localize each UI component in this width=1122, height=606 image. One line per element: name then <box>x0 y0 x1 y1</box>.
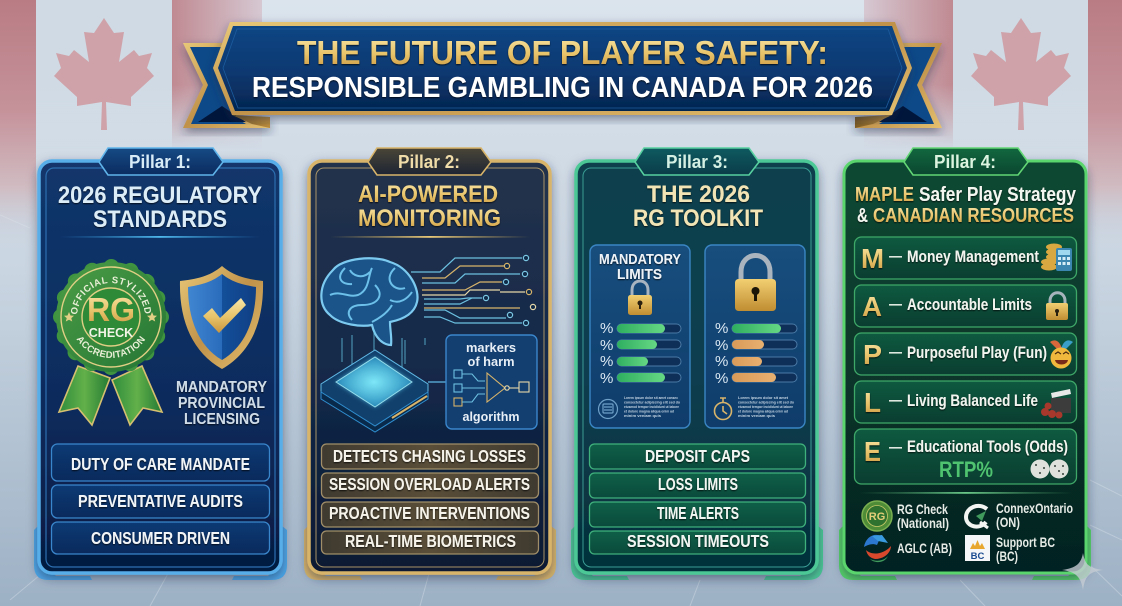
row: E educational tools <box>854 429 1076 484</box>
tab: pillar 1: Pillar 1: <box>129 152 191 172</box>
fine print left: et dolore magna aliqua enim ad <box>624 410 674 414</box>
resources: ConnexOntario <box>966 500 1073 530</box>
heading: the 2026 RG toolkit: RG TOOLKIT <box>633 205 763 232</box>
banner title line 1: THE FUTURE OF PLAYER SAFETY: <box>297 34 828 71</box>
tab: pillar 2 <box>368 148 491 175</box>
panel: pillar 2 AI monitoring <box>304 148 556 580</box>
icon: RG check badge: RG <box>87 291 135 328</box>
heading: 2026 regulatory standards: 2026 REGULATORY <box>58 182 262 209</box>
card: mandatory limits: MANDATORY <box>599 251 681 268</box>
icon: clapperboard and fruit <box>1041 389 1071 418</box>
banner plate <box>213 22 912 115</box>
panel: pillar 3 RG toolkit <box>571 148 823 580</box>
icon: stopwatch <box>714 398 732 420</box>
list: pillar 1 items: DUTY OF CARE MANDATE <box>71 454 250 474</box>
row: L living balanced life <box>854 381 1076 423</box>
list: pillar 3 items: SESSION TIMEOUTS <box>627 531 769 551</box>
row: E educational tools: RTP% <box>939 457 993 482</box>
list: pillar 2 items: SESSION OVERLOAD ALERTS <box>329 474 530 494</box>
list: pillar 3 items <box>590 444 806 554</box>
icon: jester emoji <box>1050 340 1073 368</box>
resources: RG check: RG <box>869 511 885 523</box>
tab: pillar 4 <box>904 148 1028 175</box>
icon: large padlock <box>735 256 776 311</box>
tab: pillar 4: Pillar 4: <box>934 152 996 172</box>
fine print right: et dolore magna aliqua enim ad <box>738 410 788 414</box>
row: P purposeful play <box>854 333 1076 375</box>
bars: right limits: % <box>715 337 728 354</box>
icon: RG check badge: OFFICIAL STYLIZED <box>71 276 151 314</box>
heading: AI-powered monitoring <box>358 181 501 232</box>
icon: RG check badge: CHECK <box>89 326 133 340</box>
row: P purposeful play: P <box>863 339 882 370</box>
heading: MAPLE safer play strategy: MAPLE <box>855 184 914 206</box>
icon: round audit seal <box>598 400 618 418</box>
row: P purposeful play: Purposeful Play (Fun) <box>907 344 1047 362</box>
list: pillar 3 items: DEPOSIT CAPS <box>645 446 750 466</box>
row: A accountable limits: Accountable Limits <box>907 296 1032 314</box>
list: pillar 2 items <box>322 444 538 554</box>
resources: Support BC: BC <box>971 551 984 562</box>
row: L living balanced life: Living Balanced Life <box>907 392 1038 410</box>
box: markers of harm algorithm: algorithm <box>462 409 520 424</box>
fine print right: consectetur adipiscing elit sed do <box>738 400 795 404</box>
title banner <box>183 22 942 128</box>
fine print left: Lorem ipsum dolor sit amet consec <box>624 396 678 400</box>
panel: pillar 1 regulatory standards <box>30 147 290 586</box>
box: markers of harm algorithm: of harm <box>468 354 514 369</box>
heading: 2026 regulatory standards: STANDARDS <box>93 206 227 233</box>
fine print left: minim veniam quis <box>624 414 661 418</box>
icon: licensing shield <box>180 266 263 369</box>
list: pillar 2 items: REAL-TIME BIOMETRICS <box>345 531 516 551</box>
resources: RG check <box>862 501 949 531</box>
bars: right limits <box>715 320 797 387</box>
list: pillar 3 items: LOSS LIMITS <box>658 474 738 494</box>
icon: corner sparkle <box>1062 553 1103 590</box>
bars: left limits <box>600 320 681 387</box>
heading: the 2026 RG toolkit: THE 2026 <box>647 181 750 208</box>
heading: 2026 regulatory standards <box>58 182 262 233</box>
icon: padlock <box>1046 293 1068 320</box>
fine print right: Lorem ipsum dolor sit amet <box>738 396 789 400</box>
tab: pillar 3: Pillar 3: <box>666 152 728 172</box>
row: E educational tools: E <box>864 436 881 467</box>
bars: left limits: % <box>600 337 613 354</box>
bars: left limits: % <box>600 353 613 370</box>
list: pillar 2 items: DETECTS CHASING LOSSES <box>333 446 526 466</box>
row: M money management <box>854 237 1076 279</box>
resources: RG check: (National) <box>897 515 949 531</box>
icon: RG check badge <box>53 259 169 426</box>
icon: glowing chip platform <box>321 330 428 432</box>
box: markers of harm algorithm: markers <box>466 340 516 355</box>
row: M money management: M <box>861 243 884 274</box>
list: pillar 1 items: CONSUMER DRIVEN <box>91 528 230 548</box>
card: mandatory limits <box>590 245 690 428</box>
banner left ribbon tail <box>183 43 270 128</box>
list: pillar 1 items: PREVENTATIVE AUDITS <box>78 491 243 511</box>
list: pillar 1 items <box>52 444 270 554</box>
resources: Support BC <box>965 534 1055 564</box>
fine print left: eiusmod tempor incididunt ut labore <box>624 405 679 409</box>
resources: RG check: RG Check <box>897 501 948 517</box>
badge ribbons <box>59 366 162 425</box>
bars: right limits: % <box>715 370 728 387</box>
row: A accountable limits <box>854 285 1076 327</box>
bars: right limits: % <box>715 353 728 370</box>
list: pillar 3 items: TIME ALERTS <box>657 503 739 523</box>
fine print right <box>738 396 795 418</box>
list: pillar 2 items: PROACTIVE INTERVENTIONS <box>329 503 530 523</box>
circuit traces <box>411 258 525 323</box>
fine print right: eiusmod tempor incididunt ut labore <box>738 405 793 409</box>
icon: small padlock <box>628 281 652 315</box>
heading: MAPLE safer play strategy <box>855 184 1077 227</box>
panel: pillar 4 MAPLE strategy <box>839 148 1091 580</box>
heading: MAPLE safer play strategy: Safer Play Strategy <box>919 184 1077 206</box>
row: M money management: Money Management <box>907 248 1039 266</box>
resources: Support BC: (BC) <box>996 548 1018 564</box>
icon: coins and calculator <box>1041 244 1072 271</box>
heading: MAPLE safer play strategy: CANADIAN RESOURCES <box>873 205 1074 227</box>
tab: pillar 2: Pillar 2: <box>398 152 460 172</box>
resources: AGLC <box>864 535 952 562</box>
card: second limits <box>705 245 805 428</box>
tab: pillar 3 <box>635 148 759 175</box>
heading: MAPLE safer play strategy: & <box>857 205 868 227</box>
heading: AI-powered monitoring: AI-POWERED <box>358 181 498 208</box>
fine print left <box>624 396 681 418</box>
row: E educational tools: Educational Tools (Odds) <box>907 438 1068 456</box>
tab: pillar 1 <box>99 148 223 175</box>
resources: Support BC: Support BC <box>996 534 1055 550</box>
fine print left: consectetur adipiscing elit sed do <box>624 400 681 404</box>
icon: dice <box>1030 460 1068 478</box>
heading: AI-powered monitoring: MONITORING <box>358 205 501 232</box>
text: mandatory provincial licensing: LICENSING <box>184 411 260 428</box>
resources: ConnexOntario: (ON) <box>996 514 1020 530</box>
banner title line 2: RESPONSIBLE GAMBLING IN CANADA FOR 2026 <box>252 72 873 104</box>
icon: brain with circuit lines <box>321 255 536 345</box>
resources: AGLC: AGLC (AB) <box>897 540 952 556</box>
bars: right limits: % <box>715 320 728 337</box>
row: A accountable limits: A <box>862 291 882 322</box>
icon: RG check badge: ACCREDITATION <box>76 336 146 358</box>
fine print right: minim veniam quis <box>738 414 775 418</box>
resources: ConnexOntario: ConnexOntario <box>996 500 1073 516</box>
row: L living balanced life: L <box>864 387 881 418</box>
bars: left limits: % <box>600 320 613 337</box>
text: mandatory provincial licensing <box>176 379 268 428</box>
heading: the 2026 RG toolkit <box>633 181 763 232</box>
bars: left limits: % <box>600 370 613 387</box>
text: mandatory provincial licensing: PROVINCIAL <box>178 395 265 412</box>
card: mandatory limits: LIMITS <box>617 266 662 283</box>
box: markers of harm algorithm <box>428 335 537 429</box>
text: mandatory provincial licensing: MANDATORY <box>176 379 268 396</box>
banner right ribbon tail <box>855 43 942 128</box>
